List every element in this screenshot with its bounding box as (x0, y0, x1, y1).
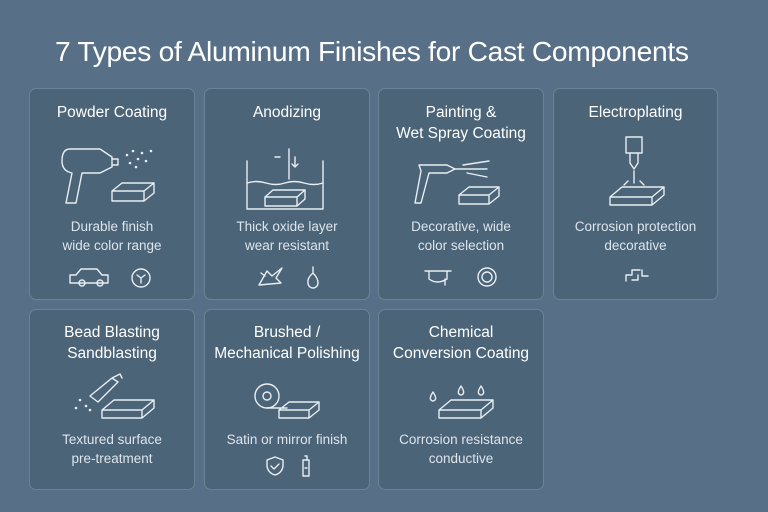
heading (214, 324, 360, 362)
icon: spray gun (414, 160, 500, 287)
heading: Brushed / (254, 324, 320, 341)
heading (396, 104, 526, 142)
icon: blaster (74, 373, 155, 419)
description: wide color range (62, 238, 162, 253)
description (411, 219, 511, 253)
heading: Wet Spray Coating (396, 125, 526, 142)
description: Corrosion protection (575, 219, 696, 234)
heading: Chemical (429, 324, 493, 341)
icon: spray gun and block (61, 148, 155, 288)
heading: Powder Coating (57, 104, 167, 121)
heading: Conversion Coating (393, 345, 529, 362)
description: Decorative, wide (411, 219, 511, 234)
title: 7 Types of Aluminum Finishes for Cast Components (55, 35, 689, 67)
icon: drops and block (430, 385, 494, 419)
description (62, 432, 162, 466)
panel: anodizing (204, 88, 370, 300)
panel: brushed (204, 309, 370, 490)
description: pre-treatment (71, 451, 153, 466)
heading: Anodizing (253, 104, 321, 121)
icon: electrode and block (609, 136, 665, 282)
panel: powder coating (29, 88, 195, 300)
heading: Sandblasting (67, 345, 157, 362)
heading (393, 324, 529, 362)
heading: Electroplating (589, 104, 682, 121)
description: Textured surface (62, 432, 162, 447)
icon: polishing wheel (254, 383, 320, 477)
heading: Bead Blasting (64, 324, 160, 341)
icon: tank (246, 148, 324, 289)
description: Corrosion resistance (399, 432, 523, 447)
description (399, 432, 523, 466)
panel: painting (378, 88, 544, 300)
description: conductive (429, 451, 493, 466)
description (62, 219, 162, 253)
description (236, 219, 338, 253)
description: wear resistant (245, 238, 329, 253)
heading (64, 324, 160, 362)
panel: chemical conversion (378, 309, 544, 490)
heading: Mechanical Polishing (214, 345, 360, 362)
heading: Painting & (426, 104, 496, 121)
panel: bead blasting (29, 309, 195, 490)
panel: electroplating (553, 88, 718, 300)
description: Durable finish (71, 219, 153, 234)
description: Satin or mirror finish (227, 432, 347, 447)
description: color selection (418, 238, 504, 253)
description: Thick oxide layer (236, 219, 338, 234)
description (575, 219, 696, 253)
description: decorative (604, 238, 667, 253)
